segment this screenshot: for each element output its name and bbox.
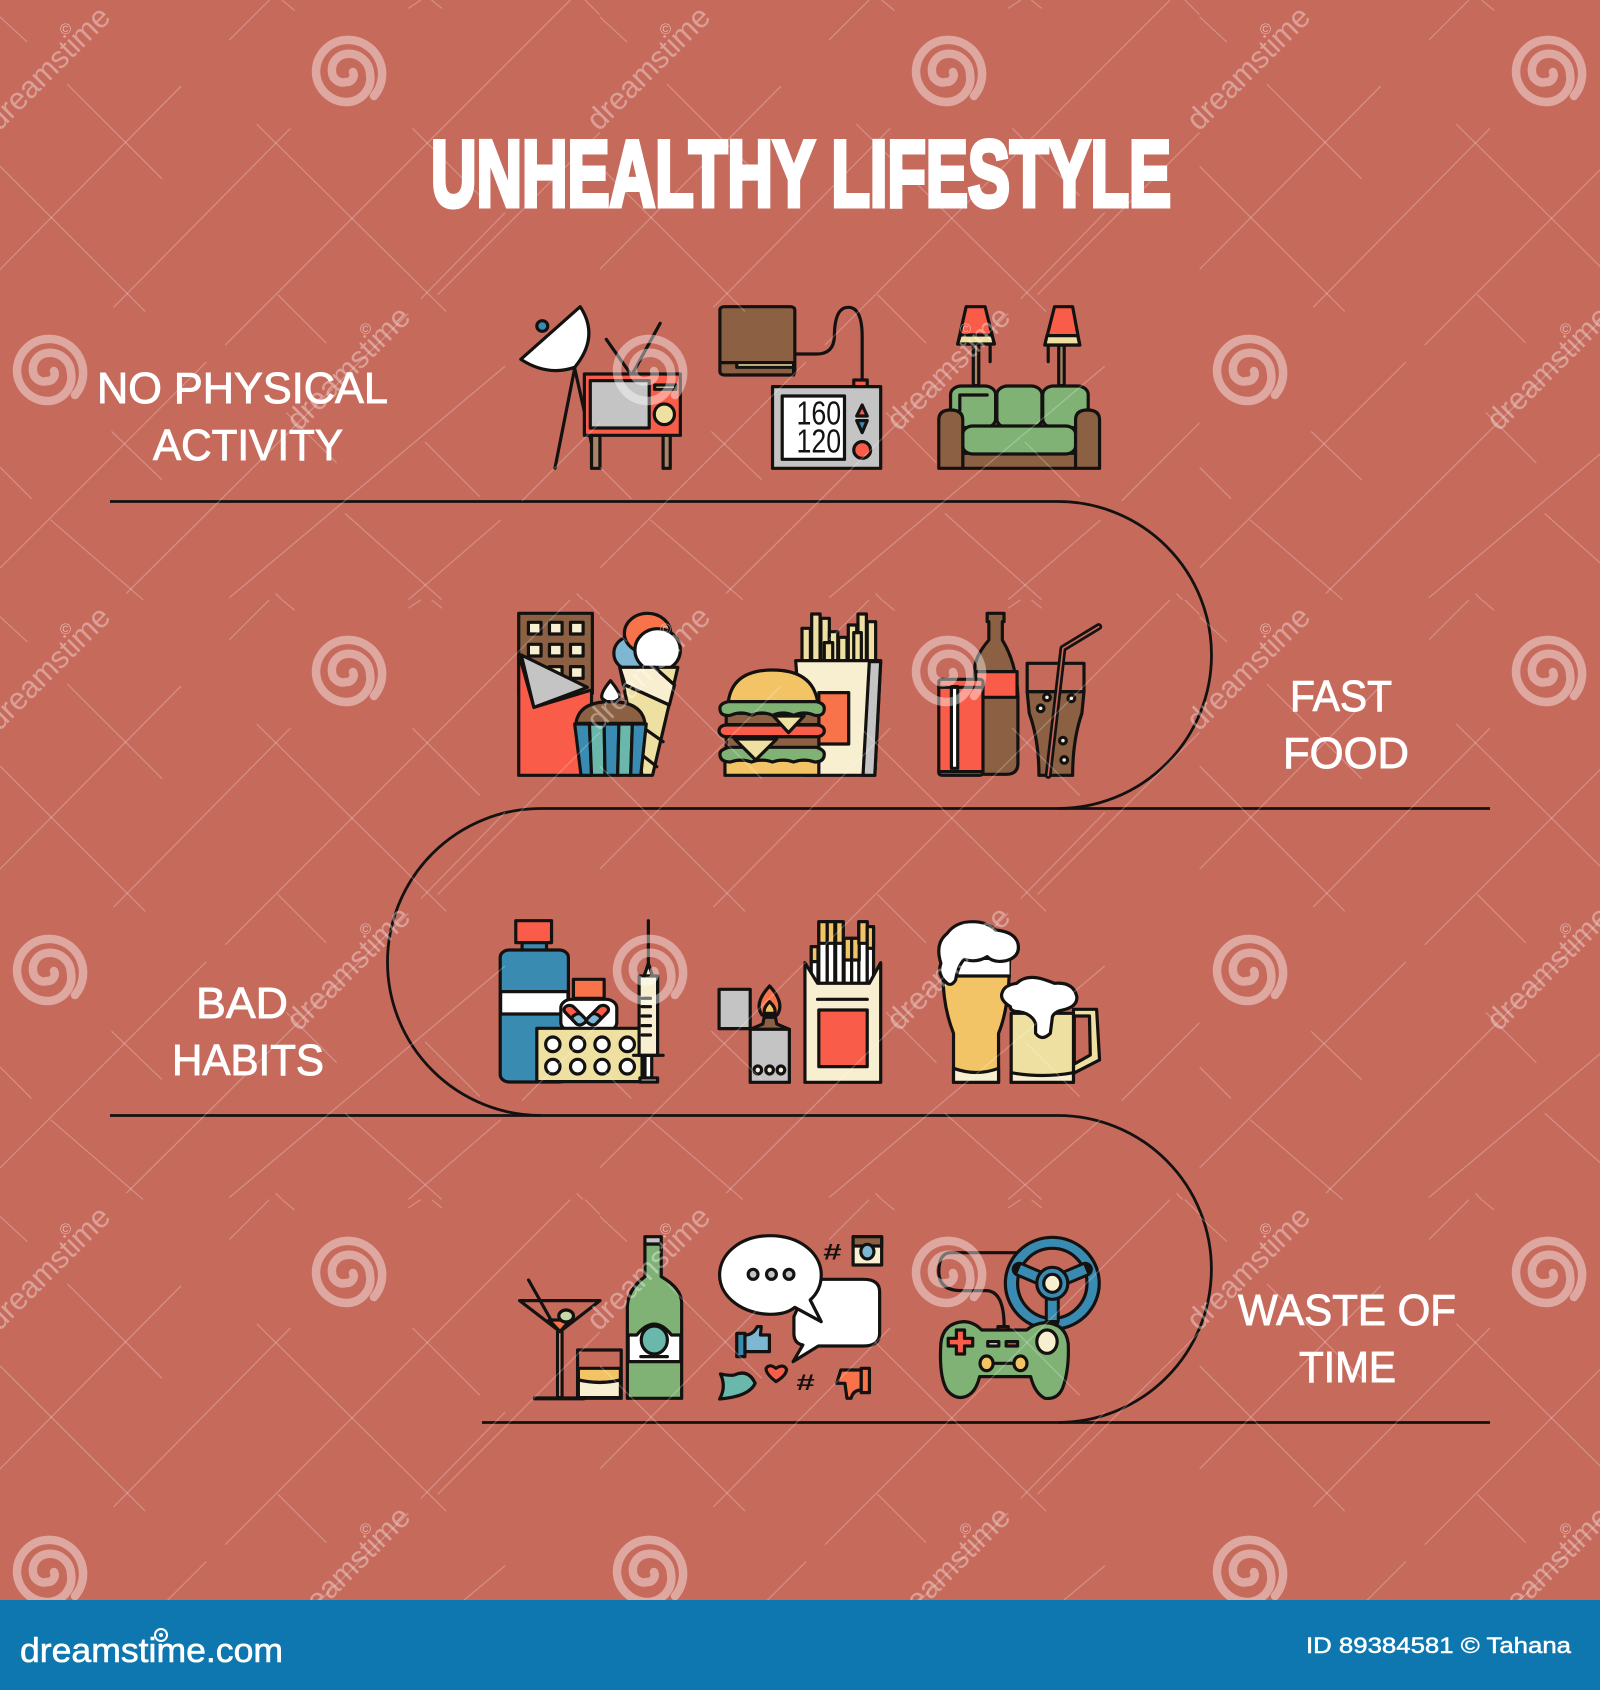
label: fast food: FAST bbox=[1290, 672, 1392, 721]
icon: blood pressure monitor: 120 bbox=[797, 424, 841, 461]
watermark wordmarks: © bbox=[1260, 621, 1271, 638]
watermark wordmarks: dreamstime bbox=[279, 299, 417, 437]
row 3 icons bbox=[500, 921, 1100, 1082]
label: waste of time bbox=[1238, 1286, 1456, 1392]
watermark wordmarks: dreamstime bbox=[1179, 1199, 1317, 1337]
title: UNHEALTHY LIFESTYLE bbox=[431, 121, 1171, 226]
label: bad habits: HABITS bbox=[172, 1036, 324, 1085]
watermark wordmarks: © bbox=[1260, 21, 1271, 38]
icon: chocolate, cupcake and ice cream bbox=[519, 613, 680, 775]
label: no physical activity: ACTIVITY bbox=[153, 421, 343, 470]
watermark wordmarks: dreamstime bbox=[279, 1499, 417, 1637]
watermark wordmarks: © bbox=[960, 921, 971, 938]
watermark wordmarks: dreamstime bbox=[579, 599, 717, 737]
label: fast food bbox=[1283, 672, 1409, 778]
icon: lighter and cigarettes bbox=[719, 922, 881, 1082]
watermark wordmarks: © bbox=[1560, 321, 1571, 338]
watermark wordmarks: © bbox=[60, 621, 71, 638]
label: no physical activity bbox=[97, 364, 388, 470]
watermark wordmarks: dreamstime bbox=[1179, 0, 1317, 137]
watermark wordmarks: © bbox=[660, 1221, 671, 1238]
watermark wordmarks: dreamstime bbox=[579, 0, 717, 137]
row 4 icons bbox=[520, 1236, 1099, 1399]
icon: social media chat bbox=[720, 1236, 882, 1399]
watermark wordmarks: © bbox=[60, 21, 71, 38]
icon: social media chat: # bbox=[823, 1241, 842, 1265]
watermark wordmarks: © bbox=[360, 1521, 371, 1538]
watermark wordmarks: © bbox=[60, 1221, 71, 1238]
icon: beer glasses bbox=[939, 922, 1100, 1082]
icon: satellite dish and tv bbox=[521, 307, 680, 468]
watermark wordmarks: © bbox=[660, 21, 671, 38]
winding path connector bbox=[110, 502, 1490, 1422]
watermark wordmarks: dreamstime bbox=[879, 1499, 1017, 1637]
footer logo: dreamstime.com bbox=[20, 1632, 283, 1670]
icon: social media chat: # bbox=[796, 1371, 815, 1395]
row 2 icons bbox=[519, 613, 1099, 775]
label: fast food: FOOD bbox=[1283, 729, 1409, 778]
watermark wordmarks: © bbox=[1560, 1521, 1571, 1538]
icon: sofa and lamps bbox=[939, 307, 1100, 468]
label: waste of time: TIME bbox=[1299, 1343, 1396, 1392]
watermark wordmarks: © bbox=[1260, 1221, 1271, 1238]
watermark wordmarks: © bbox=[360, 321, 371, 338]
footer bar bbox=[0, 1600, 1600, 1690]
watermark wordmarks: dreamstime bbox=[879, 299, 1017, 437]
watermark wordmarks: © bbox=[960, 321, 971, 338]
label: waste of time: WASTE OF bbox=[1238, 1286, 1456, 1335]
watermark wordmarks: dreamstime bbox=[579, 1199, 717, 1337]
label: bad habits bbox=[172, 979, 324, 1085]
row 1 icons bbox=[521, 307, 1100, 468]
footer credit: ID 89384581 © Tahana bbox=[1306, 1633, 1572, 1658]
watermark wordmarks: © bbox=[660, 621, 671, 638]
watermark wordmarks: © bbox=[360, 921, 371, 938]
icon: soda bottle, can and glass bbox=[939, 613, 1099, 775]
watermark wordmarks: dreamstime bbox=[1179, 599, 1317, 737]
watermark wordmarks: © bbox=[1560, 921, 1571, 938]
watermark wordmarks: © bbox=[960, 1521, 971, 1538]
label: bad habits: BAD bbox=[196, 979, 288, 1028]
icon: medicine, pills and syringe bbox=[500, 921, 663, 1082]
watermark wordmarks: dreamstime bbox=[879, 899, 1017, 1037]
icon: martini, whisky and wine bottle bbox=[520, 1237, 682, 1398]
icon: burger and fries bbox=[719, 614, 881, 775]
label: no physical activity: NO PHYSICAL bbox=[97, 364, 388, 413]
icon: blood pressure monitor: 160 bbox=[797, 396, 841, 433]
watermark wordmarks: dreamstime bbox=[279, 899, 417, 1037]
icon: steering wheel and gamepad bbox=[939, 1237, 1099, 1399]
icon: blood pressure monitor bbox=[720, 307, 881, 468]
